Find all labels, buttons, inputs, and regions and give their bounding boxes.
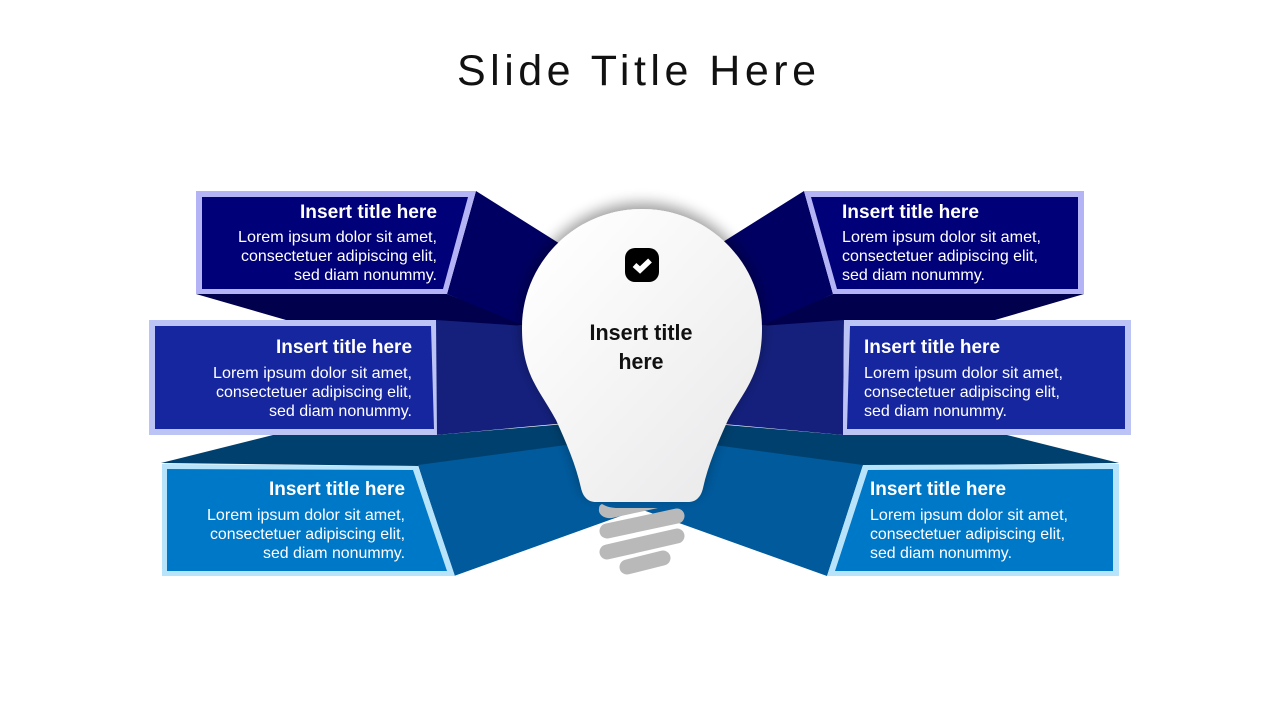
middle left heading: Insert title here — [276, 337, 412, 358]
middle left body text: Lorem ipsum dolor sit amet, — [213, 365, 412, 382]
middle right body text: Lorem ipsum dolor sit amet, — [864, 365, 1063, 382]
top right body text — [842, 229, 1041, 284]
lower left 3D extrusion — [161, 421, 640, 576]
bulb label: Insert title — [590, 320, 692, 345]
lower left heading: Insert title here — [269, 479, 405, 500]
lower right body text: consectetuer adipiscing elit, — [870, 526, 1065, 543]
middle left body text: consectetuer adipiscing elit, — [216, 384, 412, 401]
top left body text: Lorem ipsum dolor sit amet, — [238, 229, 437, 246]
top left body text — [238, 229, 437, 284]
middle right heading: Insert title here — [864, 337, 1000, 358]
top right body text: Lorem ipsum dolor sit amet, — [842, 229, 1041, 246]
title: Slide Title Here — [457, 47, 816, 95]
bulb label — [590, 320, 692, 374]
icon: bulb screw base — [599, 504, 677, 567]
top right body text: sed diam nonummy. — [842, 267, 985, 284]
bulb label: here — [618, 349, 664, 374]
panel: lower left — [162, 464, 455, 576]
lower left body text — [207, 507, 405, 562]
lower right heading: Insert title here — [870, 479, 1006, 500]
lower left body text: consectetuer adipiscing elit, — [210, 526, 405, 543]
middle right body text: sed diam nonummy. — [864, 403, 1007, 420]
lower left body text: Lorem ipsum dolor sit amet, — [207, 507, 405, 524]
middle right body text: consectetuer adipiscing elit, — [864, 384, 1060, 401]
panel: middle left — [149, 320, 437, 435]
top right body text: consectetuer adipiscing elit, — [842, 248, 1038, 265]
lower right 3D extrusion — [640, 421, 1119, 576]
top right 3D extrusion — [680, 191, 1084, 326]
middle left 3D extrusion — [436, 320, 600, 435]
middle left body text: sed diam nonummy. — [269, 403, 412, 420]
top right heading: Insert title here — [842, 202, 979, 223]
middle right body text — [864, 365, 1063, 420]
panel: middle right — [843, 320, 1131, 435]
lower right body text: sed diam nonummy. — [870, 545, 1012, 562]
top left 3D extrusion — [196, 191, 600, 326]
top left heading: Insert title here — [300, 202, 437, 223]
middle right 3D extrusion — [680, 320, 844, 435]
middle left body text — [213, 365, 412, 420]
panel: top left — [196, 191, 476, 294]
lower right body text: Lorem ipsum dolor sit amet, — [870, 507, 1068, 524]
lower left body text: sed diam nonummy. — [263, 545, 405, 562]
panel: top right — [804, 191, 1084, 294]
panel: lower right — [827, 464, 1119, 576]
lower right body text — [870, 507, 1068, 562]
icon: check badge — [625, 248, 659, 282]
bulb — [522, 209, 762, 502]
top left body text: consectetuer adipiscing elit, — [241, 248, 437, 265]
top left body text: sed diam nonummy. — [294, 267, 437, 284]
